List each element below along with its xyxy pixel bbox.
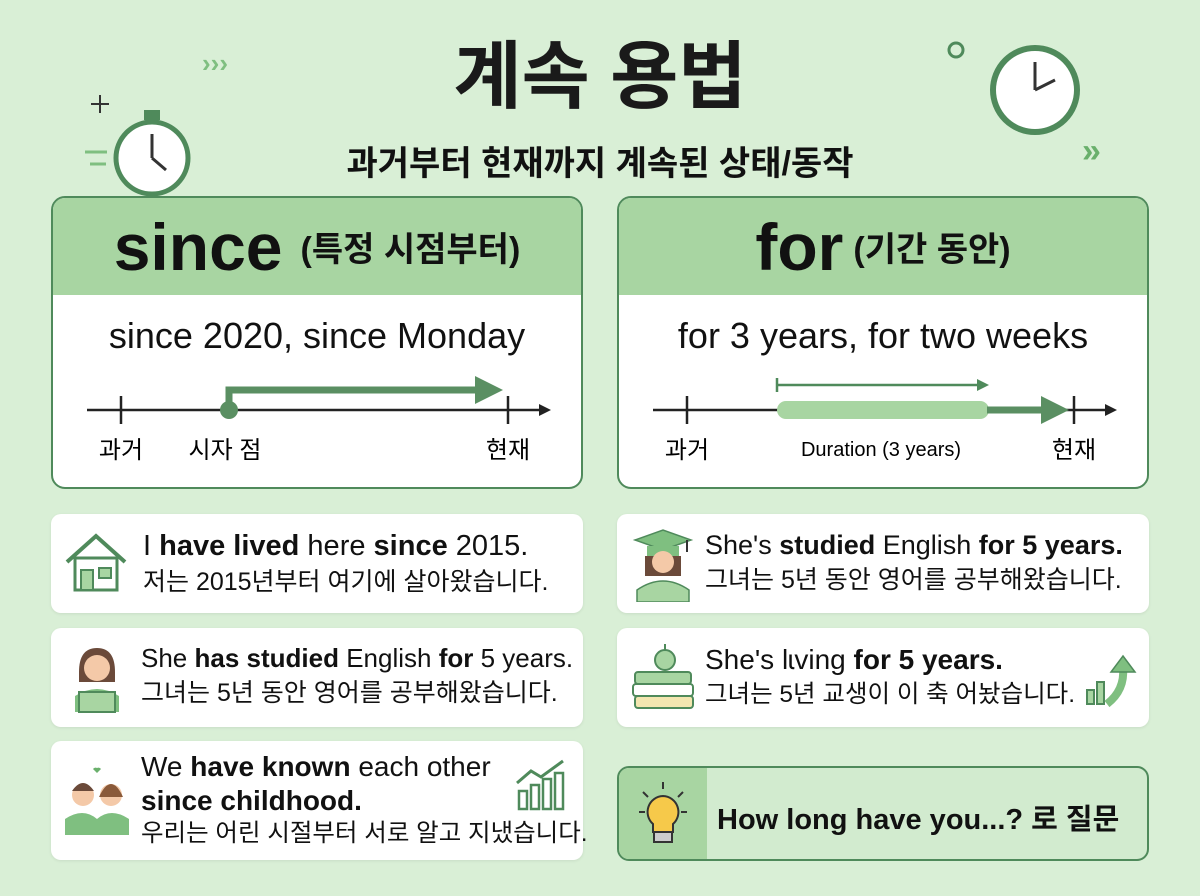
icon: growth arrow bbox=[1086, 654, 1136, 707]
for timeline: Duration (3 years) bbox=[801, 439, 961, 461]
card: she's living bbox=[617, 628, 1149, 727]
sentence: I have lived here since 2015. bbox=[143, 530, 528, 562]
sentence: 그녀는 5년 동안 영어를 공부해왔습니다. bbox=[705, 566, 1122, 594]
sentence bbox=[705, 644, 1075, 708]
for heading: (기간 동안) bbox=[853, 231, 1011, 269]
text: » bbox=[1082, 132, 1101, 170]
sentence: She has studied English for 5 years. bbox=[141, 643, 573, 673]
since timeline bbox=[87, 376, 551, 464]
sentence: 그녀는 5년 동안 영어를 공부해왔습니다. bbox=[141, 679, 558, 707]
card: since 2015 bbox=[51, 514, 583, 613]
icon: chart bbox=[516, 760, 564, 810]
icon: light bulb bbox=[619, 768, 707, 859]
since timeline: 과거 bbox=[99, 437, 143, 464]
sentence: 저는 2015년부터 여기에 살아왔습니다. bbox=[143, 568, 548, 596]
for timeline: 과거 bbox=[665, 437, 709, 464]
sentence: 우리는 어린 시절부터 서로 알고 지냈습니다. bbox=[141, 820, 588, 847]
sentence: She's studied English for 5 years. bbox=[705, 530, 1123, 560]
sentence bbox=[141, 643, 573, 707]
for timeline bbox=[653, 378, 1117, 464]
card: she's studied bbox=[617, 514, 1149, 613]
sentence: She's lɩving for 5 years. bbox=[705, 644, 1003, 675]
icon: books and apple bbox=[632, 644, 694, 709]
since timeline: 현재 bbox=[486, 437, 530, 464]
icon: friends bbox=[65, 768, 129, 835]
since heading bbox=[53, 198, 581, 295]
sentence: since childhood. bbox=[141, 785, 362, 816]
panel: since bbox=[51, 196, 583, 489]
callout text: How long have you...? 로 질문 bbox=[717, 804, 1119, 836]
icon: graduate bbox=[633, 529, 693, 602]
callout: how long bbox=[617, 766, 1149, 861]
for heading: for bbox=[755, 210, 843, 284]
card: since childhood bbox=[51, 741, 583, 860]
for examples: for 3 years, for two weeks bbox=[678, 315, 1088, 356]
since heading: (특정 시점부터) bbox=[300, 231, 520, 269]
since heading: since bbox=[114, 210, 282, 284]
card: for 5 years studied bbox=[51, 628, 583, 727]
title: 계속 용법 bbox=[454, 35, 746, 118]
sentence bbox=[141, 751, 588, 847]
sentence: We have known each other bbox=[141, 751, 491, 782]
icon: house bbox=[66, 534, 126, 592]
panel: for bbox=[617, 196, 1149, 489]
decorative icons top bbox=[85, 48, 228, 196]
subtitle: 과거부터 현재까지 계속된 상태/동작 bbox=[346, 145, 853, 183]
since timeline: 시자 점 bbox=[189, 437, 261, 464]
for heading bbox=[619, 198, 1147, 295]
sentence bbox=[143, 530, 548, 596]
sentence bbox=[705, 530, 1123, 594]
sentence: 그녀는 5년 교생이 이 축 어놨습니다. bbox=[705, 681, 1075, 708]
since examples: since 2020, since Monday bbox=[109, 315, 525, 356]
icon: girl reading bbox=[75, 648, 119, 713]
for timeline: 현재 bbox=[1052, 437, 1096, 464]
decorative icons top: ››› bbox=[202, 48, 228, 78]
